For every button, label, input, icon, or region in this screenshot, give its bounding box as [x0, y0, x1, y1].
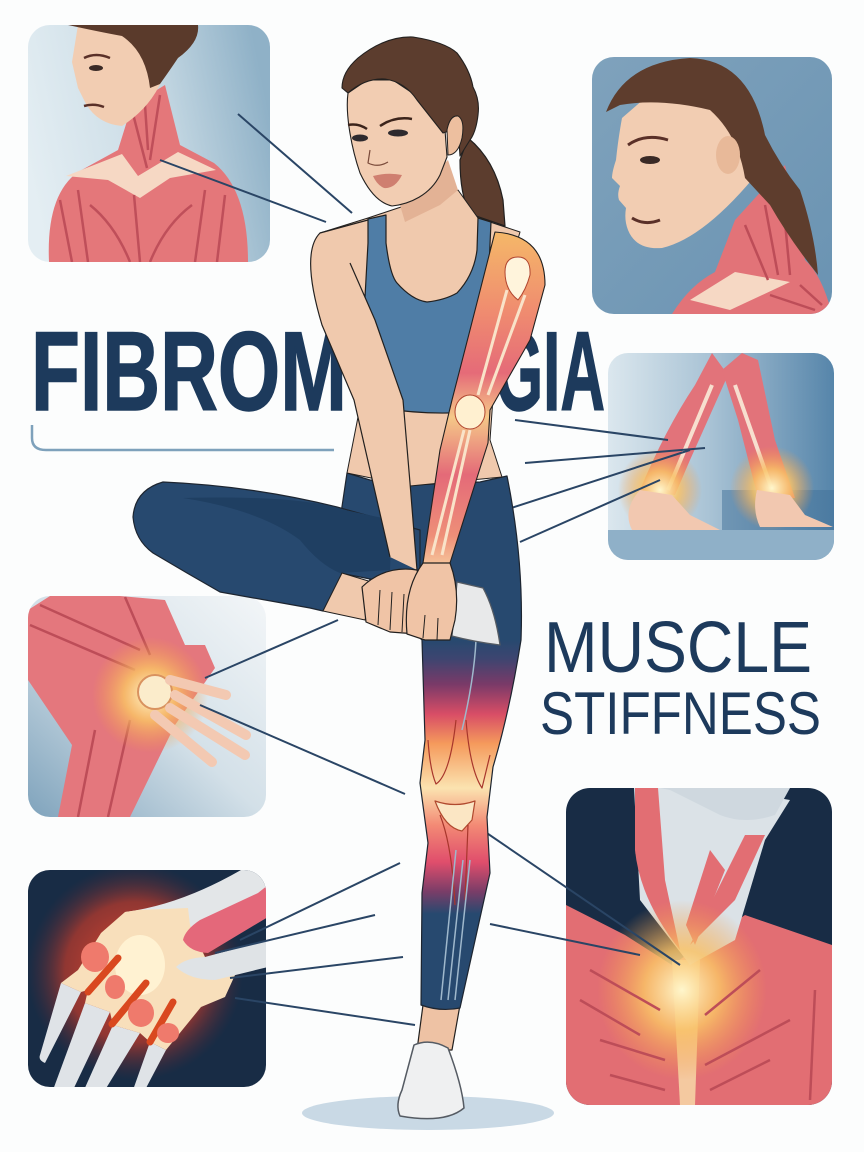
sternum — [672, 960, 700, 1105]
red glow — [32, 870, 238, 1074]
wrist joint — [138, 675, 172, 709]
fingers — [155, 680, 246, 762]
tendons — [668, 385, 772, 490]
arm tendons — [432, 290, 525, 555]
collarbone highlight — [66, 152, 216, 198]
chest glow — [597, 900, 767, 1080]
left neck muscle — [635, 788, 680, 950]
eyebrows — [348, 118, 412, 129]
shoe — [398, 1042, 464, 1119]
subtitle: Muscle Stiffness — [540, 608, 821, 747]
hair — [606, 58, 818, 275]
ankle glows — [618, 446, 814, 532]
panel: woman's neck profile — [592, 57, 832, 314]
finger lines — [378, 590, 438, 640]
ear — [447, 116, 463, 155]
facial features — [84, 55, 110, 107]
leg muscles — [640, 353, 728, 495]
elbow joint — [455, 395, 485, 429]
lips — [373, 174, 402, 188]
palm — [61, 908, 235, 1050]
wrist glow — [99, 641, 206, 749]
facial features — [628, 137, 668, 223]
panel: chest and neck muscles — [566, 788, 832, 1105]
tank top — [363, 215, 491, 413]
left arm outline — [311, 220, 417, 570]
forearm bone — [176, 940, 268, 980]
standing ankle — [417, 1005, 460, 1050]
hair — [68, 25, 198, 88]
subtitle: Muscle Stiffness: MUSCLE — [544, 608, 812, 688]
chin — [660, 788, 790, 820]
neck and shoulder muscles — [672, 165, 832, 314]
wall — [722, 490, 834, 530]
neck shading — [400, 160, 458, 222]
ponytail — [460, 138, 505, 226]
shoulder joint — [505, 257, 530, 300]
finger gaps — [88, 958, 173, 1042]
panel: legs and feet — [608, 353, 834, 560]
raised thigh — [133, 482, 420, 611]
muscle lines — [745, 190, 822, 310]
knee joint — [435, 801, 475, 831]
right neck muscle — [690, 835, 765, 945]
leg muscle outlines — [428, 720, 490, 905]
right muscle arm — [423, 232, 545, 563]
arm muscles — [28, 596, 215, 817]
nose — [368, 150, 388, 165]
hair — [342, 37, 478, 156]
raised shin skin — [323, 573, 375, 620]
inflamed patches — [81, 942, 179, 1043]
title: Fibromyalgia: YAL — [352, 309, 488, 434]
panel: neck and shoulder muscles — [28, 25, 270, 262]
thigh shadow — [183, 498, 392, 573]
left arm — [311, 220, 417, 570]
fingers — [40, 983, 166, 1090]
muscle lines — [60, 95, 225, 262]
muscle lines — [30, 597, 150, 817]
neck — [634, 788, 790, 965]
pointer lines — [160, 114, 705, 1025]
front hand — [406, 563, 457, 640]
panel: wrist and forearm — [28, 596, 266, 817]
raised foot shoe — [452, 582, 500, 645]
muscle — [183, 885, 268, 953]
title: Fibromyalgia: GIA — [495, 309, 605, 434]
face — [612, 102, 750, 248]
subtitle: Muscle Stiffness: STIFFNESS — [540, 680, 821, 747]
centre neck muscle — [686, 850, 725, 945]
title: Fibromyalgia: FIBROM — [31, 309, 347, 434]
legging stripes — [441, 640, 476, 1000]
title underline — [32, 425, 334, 450]
chest muscles — [566, 905, 832, 1105]
figure: woman stretching — [133, 37, 545, 1119]
eye — [89, 65, 103, 71]
bright centre — [115, 935, 165, 995]
torso muscles — [49, 85, 248, 262]
muscle lines — [580, 970, 815, 1100]
eye — [640, 156, 660, 164]
gripping hand — [362, 569, 425, 634]
panel: hand bones — [27, 864, 270, 1090]
head — [72, 25, 162, 126]
feet — [628, 490, 720, 530]
face — [347, 80, 447, 206]
forearm top bone — [126, 870, 266, 927]
floor — [608, 530, 834, 560]
standing leg leggings — [340, 473, 521, 1009]
torso skin — [320, 190, 520, 486]
collarbone highlight — [690, 272, 790, 310]
eyes — [352, 130, 408, 142]
ear — [716, 136, 740, 174]
floor shadow — [302, 1096, 554, 1130]
